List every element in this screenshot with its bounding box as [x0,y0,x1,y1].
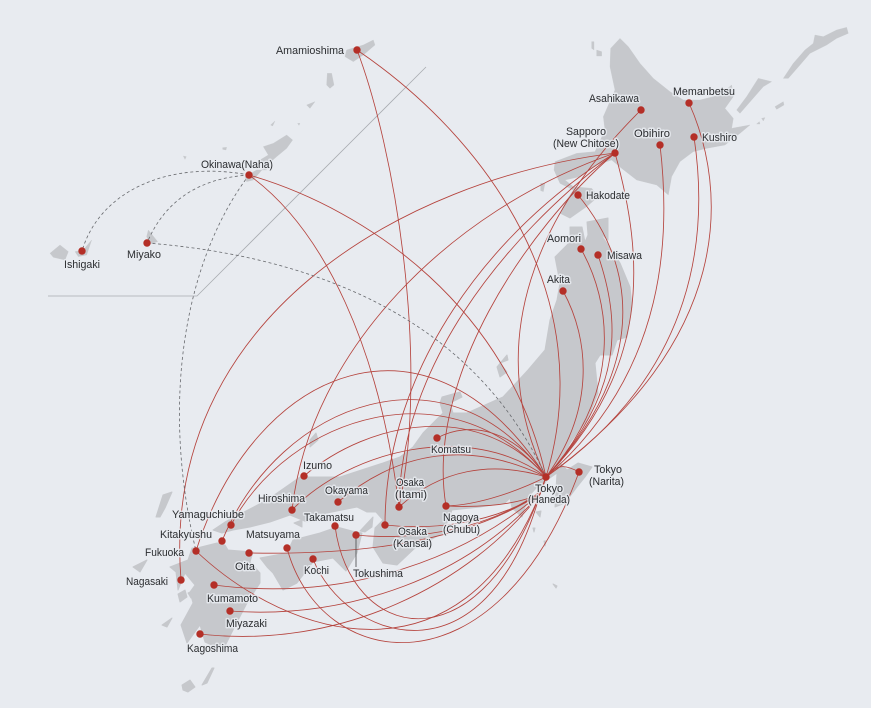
airport labels: Hiroshima [258,493,306,505]
airport labels: Akita [547,274,571,286]
dashed routes [82,171,546,551]
land: Hokkaido and Kuril islands [541,27,848,218]
land: Kyushu [170,543,260,650]
flight routes [180,50,711,643]
land: Shikoku [260,527,362,590]
land: Awaji [360,517,373,532]
airport labels: Amamioshima [276,45,345,57]
airport labels: Izumo [303,460,332,472]
airport labels: Kagoshima [187,643,239,655]
airport labels: Sapporo [566,126,606,138]
airport labels: (Kansai) [393,538,432,550]
airport labels: (Chubu) [443,524,480,536]
airport labels: Aomori [547,233,581,245]
airport labels: (Itami) [395,489,427,501]
map inset divider line [48,67,426,296]
airport labels: Miyazaki [226,618,267,630]
airport labels: Matsuyama [246,529,301,541]
airport labels: Tokyo [535,483,563,495]
airport labels: Oita [235,561,256,573]
airport labels: Asahikawa [589,93,640,105]
airport labels: (Narita) [589,476,624,488]
airport labels: Komatsu [431,444,471,456]
airport labels: Nagasaki [126,576,168,588]
airport labels: Tokyo [594,464,622,476]
airport labels: Osaka [398,526,428,538]
airport labels: Tokushima [353,568,404,580]
airport labels: Kochi [304,565,329,577]
airport labels: Hakodate [586,190,630,202]
airport labels [64,45,737,655]
airport labels: Nagoya [443,512,480,524]
airport labels: Osaka [396,477,425,489]
airport labels: Obihiro [634,128,670,140]
airport labels: Miyako [127,249,161,261]
airport labels: Okinawa(Naha) [201,159,273,171]
airport labels: (New Chitose) [553,138,619,150]
airport labels: Kushiro [702,132,737,144]
land: southern and smaller islands [133,355,557,692]
airport labels: Misawa [607,250,643,262]
Tokushima leader line [355,535,357,567]
airport labels: Fukuoka [145,547,185,559]
land: Ryukyu islands [50,40,375,260]
airport labels: Takamatsu [304,512,354,524]
land: Honshu [213,218,632,565]
airport labels: Okayama [325,485,369,497]
airport labels: Kitakyushu [160,529,212,541]
airport labels: Yamaguchiube [172,509,244,521]
airport labels: Kumamoto [207,593,258,605]
airport dots [78,46,698,638]
airport labels: Ishigaki [64,259,100,271]
airport labels: Memanbetsu [673,86,735,98]
airport labels: (Haneda) [528,494,570,506]
